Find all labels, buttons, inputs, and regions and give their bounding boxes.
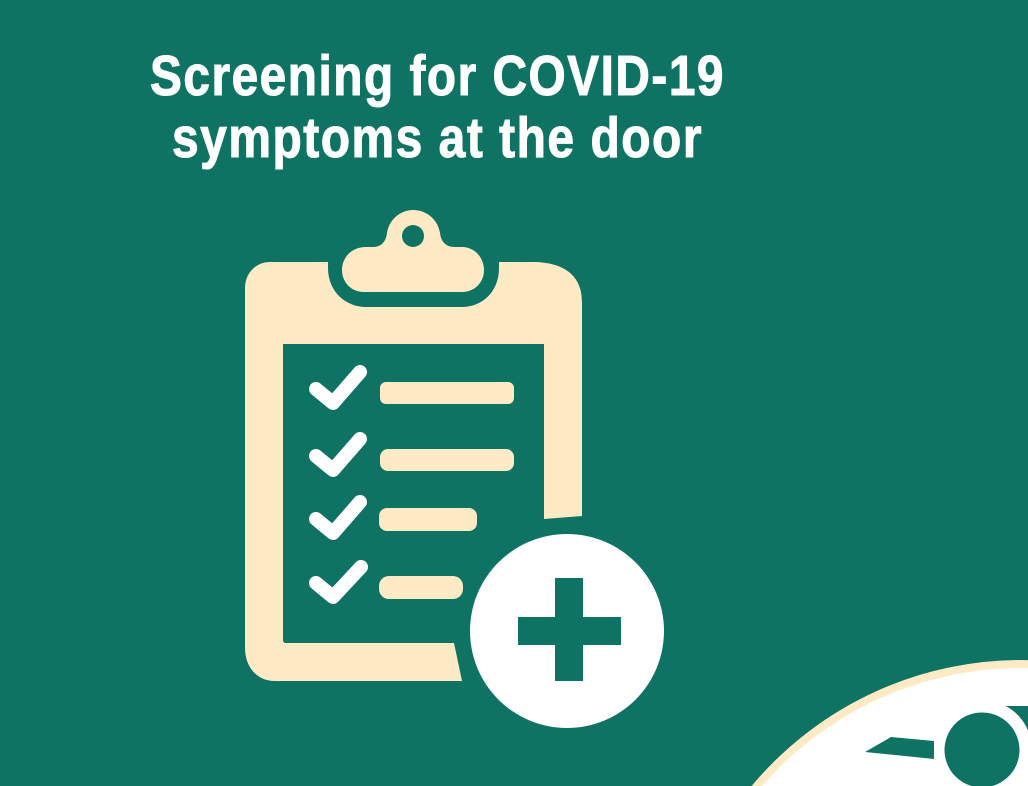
emblem wing (865, 737, 934, 759)
checklist row 1 (316, 372, 514, 404)
icon: clipboard with checklist (245, 210, 582, 681)
emblem top-right shape (1005, 706, 1028, 730)
emblem circle (944, 712, 1020, 786)
corner emblem (752, 660, 1028, 786)
title: Screening for COVID-19 (150, 44, 725, 108)
clipboard board (245, 262, 582, 681)
icon: medical plus badge (470, 534, 664, 728)
title: symptoms at the door (172, 106, 703, 170)
title (150, 44, 725, 170)
checklist row 3 (316, 502, 477, 533)
clipboard clip (342, 210, 484, 292)
checklist row 2 (316, 439, 514, 471)
checklist row 4 (316, 567, 463, 599)
